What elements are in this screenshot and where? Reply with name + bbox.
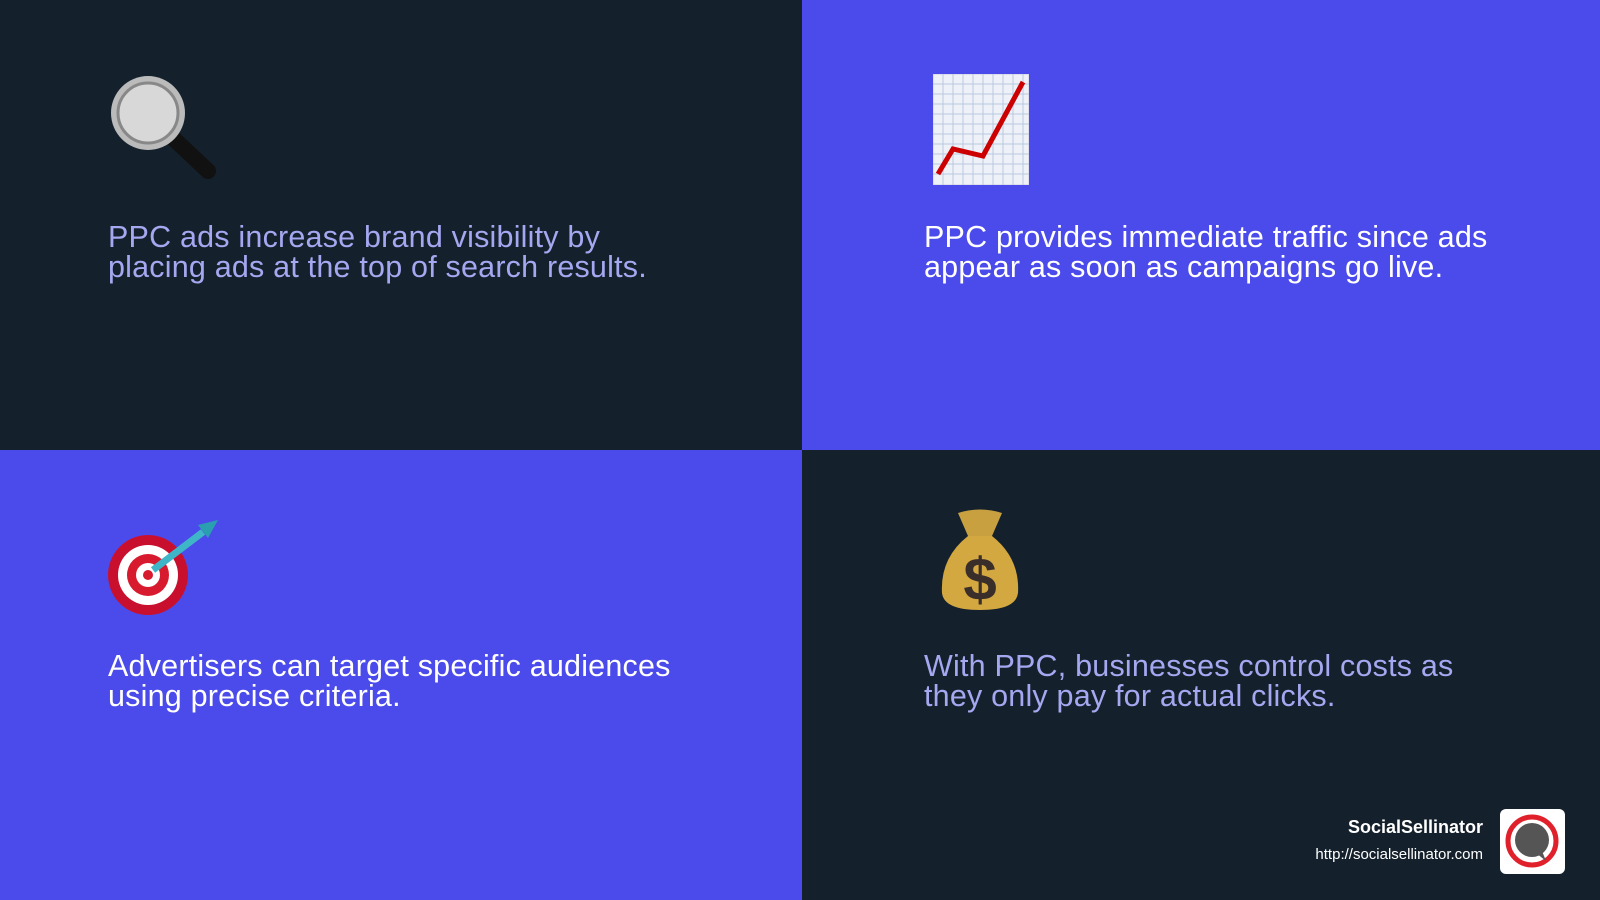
text: traffic: appear as soon as campaigns go live. <box>924 250 1443 284</box>
brand name: SocialSellinator <box>1348 817 1483 837</box>
brand url: http://socialsellinator.com <box>1315 846 1483 863</box>
logo <box>1500 809 1565 874</box>
panel: cost <box>802 450 1600 900</box>
panel: targeting <box>0 450 802 900</box>
icon: money bag: $ <box>963 546 997 612</box>
brand block <box>1315 809 1565 874</box>
panel: visibility <box>0 0 802 450</box>
text: traffic <box>924 220 1487 284</box>
text: cost <box>924 649 1454 713</box>
icon: chart <box>933 74 1029 185</box>
icon: target <box>108 520 218 615</box>
text: targeting <box>108 649 671 713</box>
panel: traffic <box>802 0 1600 450</box>
text: targeting: using precise criteria. <box>108 679 401 713</box>
text: visibility: PPC ads increase brand visibility by <box>108 220 600 254</box>
text: visibility: placing ads at the top of search results. <box>108 250 647 284</box>
text: cost: With PPC, businesses control costs as <box>924 649 1454 683</box>
icon: money bag <box>942 510 1018 612</box>
text: visibility <box>108 220 647 284</box>
text: traffic: PPC provides immediate traffic since ads <box>924 220 1487 254</box>
text: cost: they only pay for actual clicks. <box>924 679 1336 713</box>
icon: magnifying glass <box>111 76 216 179</box>
text: targeting: Advertisers can target specific audiences <box>108 649 671 683</box>
